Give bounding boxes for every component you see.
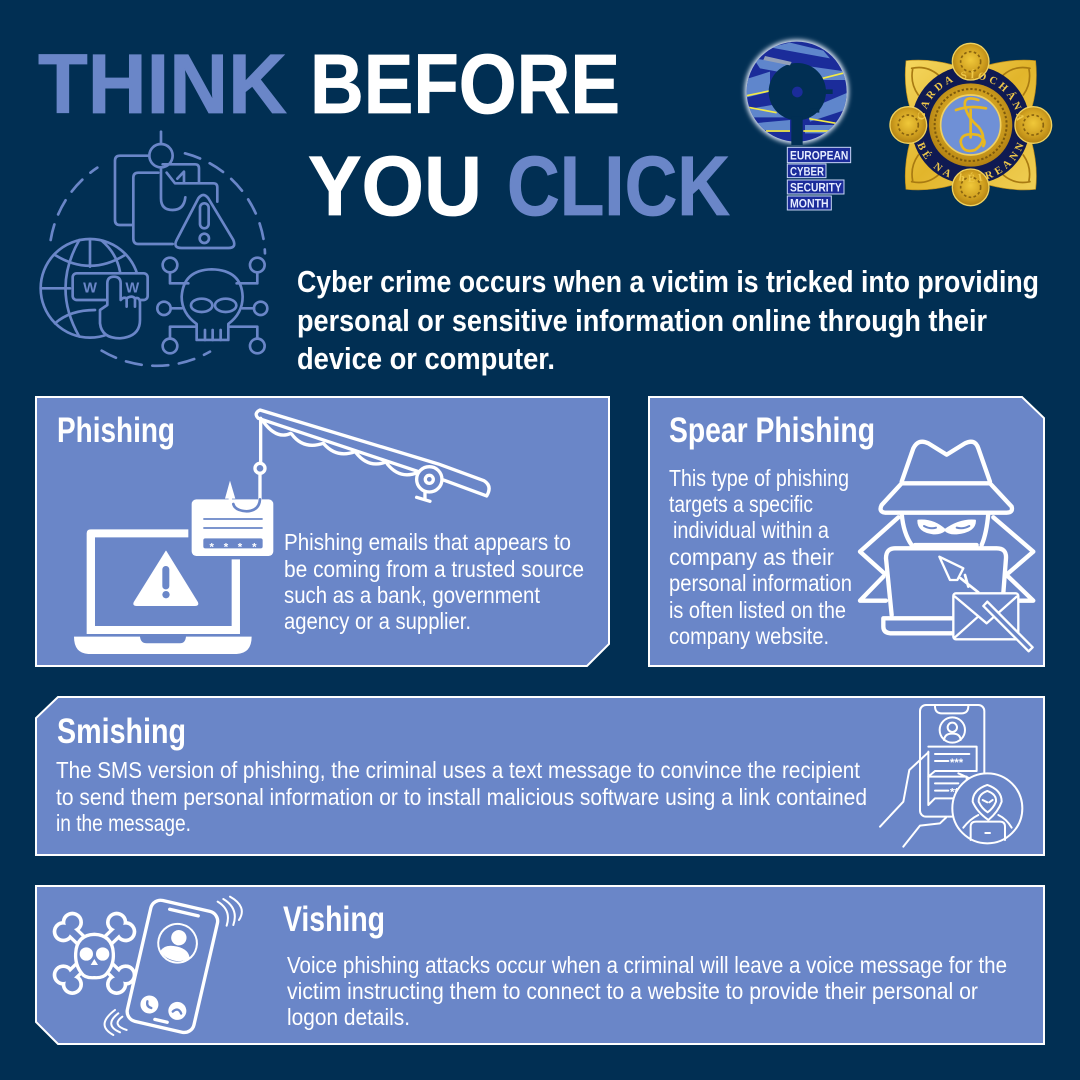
phishing description	[284, 529, 584, 634]
title: THINK	[38, 37, 287, 131]
title: CLICK	[507, 139, 730, 233]
phishing heading: Phishing	[57, 411, 175, 450]
vishing heading: Vishing	[283, 900, 385, 939]
icon: hand holding phone with hacker messages: **	[950, 787, 959, 799]
vishing panel background	[36, 886, 1044, 1044]
panel: spear phishing	[649, 397, 1044, 666]
title	[38, 37, 730, 233]
icon: hand holding phone with hacker messages	[880, 705, 1022, 847]
spear phishing description: This type of phishing	[669, 465, 849, 491]
phishing description: be coming from a trusted source	[284, 556, 584, 582]
spear phishing description: personal information	[669, 570, 852, 596]
intro text: personal or sensitive information online through their	[297, 303, 987, 338]
title: YOU	[308, 139, 482, 233]
icon: fishing rod hooking a login card over a laptop: *	[238, 541, 243, 553]
panel: vishing	[36, 886, 1044, 1044]
logo wordmark: CYBER	[790, 164, 824, 178]
icon: hand holding phone with hacker messages: ***	[950, 757, 964, 769]
spear phishing panel background	[649, 397, 1044, 666]
logo wordmark: MONTH	[790, 197, 829, 211]
logo: European Cyber Security Month	[743, 40, 851, 211]
icon: fishing rod hooking a login card over a laptop	[74, 410, 489, 654]
smishing description: to send them personal information or to install malicious software using a link contained	[56, 784, 867, 810]
vishing description: Voice phishing attacks occur when a criminal will leave a voice message for the	[287, 952, 1007, 978]
panel: smishing	[36, 697, 1044, 855]
icon: fishing rod hooking a login card over a laptop: *	[209, 541, 214, 553]
vishing description: logon details.	[287, 1004, 410, 1030]
smishing panel background	[36, 697, 1044, 855]
spear phishing description: company website.	[669, 623, 829, 649]
icon: cyber threats line illustration: W	[125, 281, 139, 297]
spear phishing description: is often listed on the	[669, 597, 846, 623]
vishing description: victim instructing them to connect to a website to provide their personal or	[287, 978, 978, 1004]
phishing description: such as a bank, government	[284, 582, 541, 608]
icon: skull and crossbones beside ringing phone	[53, 897, 242, 1035]
icon: hooded hacker with laptop and spear through envelope	[860, 442, 1033, 651]
logo: Garda Síochána badge: BÉ NA hÉIREANN	[917, 142, 1024, 182]
icon: fishing rod hooking a login card over a laptop: *	[224, 541, 229, 553]
smishing description: in the message.	[56, 810, 191, 836]
phishing description: agency or a supplier.	[284, 608, 471, 634]
smishing description: The SMS version of phishing, the criminal uses a text message to convince the recipient	[56, 757, 861, 783]
logo wordmark: EUROPEAN	[790, 149, 848, 163]
logo wordmark	[787, 147, 851, 211]
smishing heading: Smishing	[57, 712, 186, 751]
phishing panel background	[36, 397, 609, 666]
logo wordmark: SECURITY	[790, 181, 842, 195]
smishing description	[56, 757, 867, 836]
spear phishing description: targets a specific	[669, 491, 813, 517]
title: BEFORE	[310, 37, 620, 131]
phishing description: Phishing emails that appears to	[284, 529, 571, 555]
logo: Garda Síochána badge: GARDA SÍOCHÁNA	[918, 69, 1024, 121]
intro text: device or computer.	[297, 341, 555, 376]
vishing description	[287, 952, 1007, 1030]
spear phishing heading: Spear Phishing	[669, 411, 875, 450]
icon: fishing rod hooking a login card over a laptop: *	[252, 541, 257, 553]
intro text	[297, 264, 1039, 376]
icon: cyber threats line illustration	[41, 132, 267, 366]
logo: Garda Síochána badge	[889, 42, 1052, 206]
spear phishing description: company as their	[669, 544, 834, 570]
spear phishing description	[669, 465, 852, 649]
icon: cyber threats line illustration: W	[83, 281, 97, 297]
panel: phishing	[36, 397, 609, 666]
spear phishing description: individual within a	[673, 517, 829, 543]
